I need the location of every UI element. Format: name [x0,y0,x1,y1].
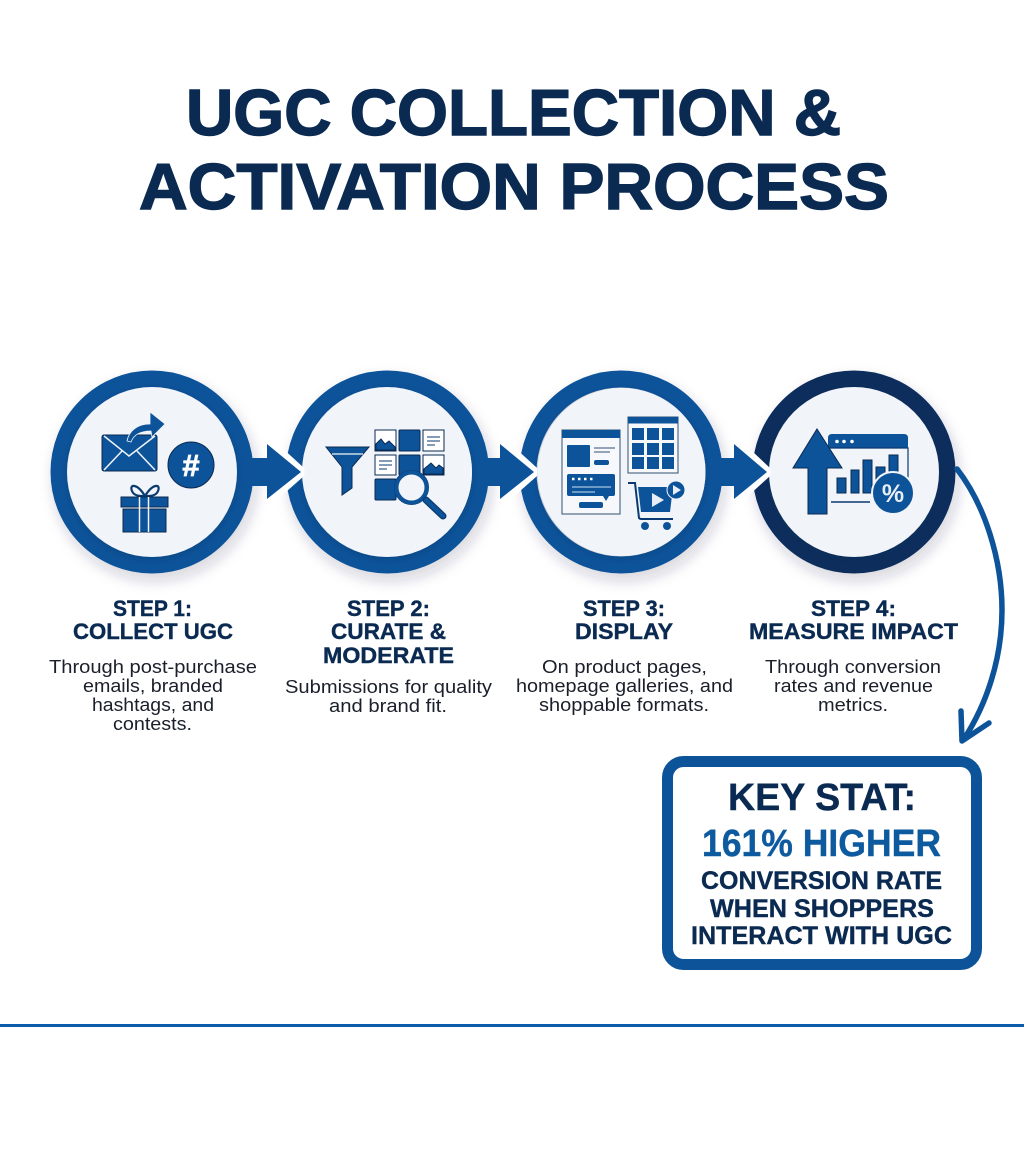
step 3 description [516,656,733,715]
step 3 description: On product pages, [542,656,707,677]
step 1 label: COLLECT UGC [73,619,233,644]
icon: gallery grid [628,417,678,473]
step 1 circle: collect UGC [59,379,245,565]
arrow: step 1 to step 2 [251,441,301,502]
icon: funnel [326,447,369,495]
step 3 label [516,596,733,715]
title: UGC COLLECTION & [186,76,841,149]
arrow: step 3 to step 4 [720,441,767,502]
step 3 label: DISPLAY [575,619,673,644]
icon: hashtag badge [168,442,214,488]
icon: product page [562,430,620,514]
step 3 description: shoppable formats. [539,694,709,715]
step 4 circle: measure impact [761,379,947,565]
icon: shopping cart with play buttons [628,481,685,530]
step 1 description: Through post-purchase [49,656,257,677]
callout: key stat: WHEN SHOPPERS [710,895,934,923]
callout: key stat: 161% HIGHER [702,823,941,865]
step 4 description: rates and revenue [774,675,933,696]
step 1 description: hashtags, and [92,694,214,715]
icon: envelope with share arrow [102,412,165,471]
step 1 description [49,656,257,734]
step 3 label: STEP 3: [583,596,665,621]
step 4 label: MEASURE IMPACT [749,619,959,644]
step 4 description [765,656,941,715]
icon: percent badge: % [882,480,904,508]
step 4 description: Through conversion [765,656,941,677]
icon: hashtag badge: # [182,448,200,483]
step 2 label [285,596,493,716]
step 2 description: Submissions for quality [285,676,493,697]
title [139,76,889,223]
step 3 circle: display [528,379,714,565]
title: ACTIVATION PROCESS [139,150,889,223]
arrow: step 2 to step 3 [486,441,534,502]
callout: key stat: KEY STAT: [728,777,916,819]
icon: magnifying glass [394,470,443,516]
step 2 circle: curate and moderate [294,379,480,565]
step 1 label: STEP 1: [113,596,192,621]
step 2 label: MODERATE [323,643,454,668]
step 4 label: STEP 4: [811,596,896,621]
icon: percent badge [872,472,914,514]
icon: gift box [121,486,168,532]
icon: upward arrow [793,429,842,514]
step 2 label: CURATE & [331,619,446,644]
step 2 label: STEP 2: [347,596,430,621]
step 3 description: homepage galleries, and [516,675,733,696]
step 1 description: contests. [113,713,192,734]
step 4 label [749,596,959,715]
icon: content tile grid [375,430,444,500]
curved arrow: step 4 to key stat [957,469,1002,741]
callout: key stat: CONVERSION RATE [701,867,942,895]
callout: key stat: INTERACT WITH UGC [691,922,952,950]
callout: key stat [668,762,976,964]
step 2 description: and brand fit. [329,695,447,716]
step 2 description [285,676,493,716]
step 1 label [49,596,257,734]
step 4 description: metrics. [818,694,888,715]
icon: browser window chart [828,434,908,502]
step 1 description: emails, branded [83,675,223,696]
